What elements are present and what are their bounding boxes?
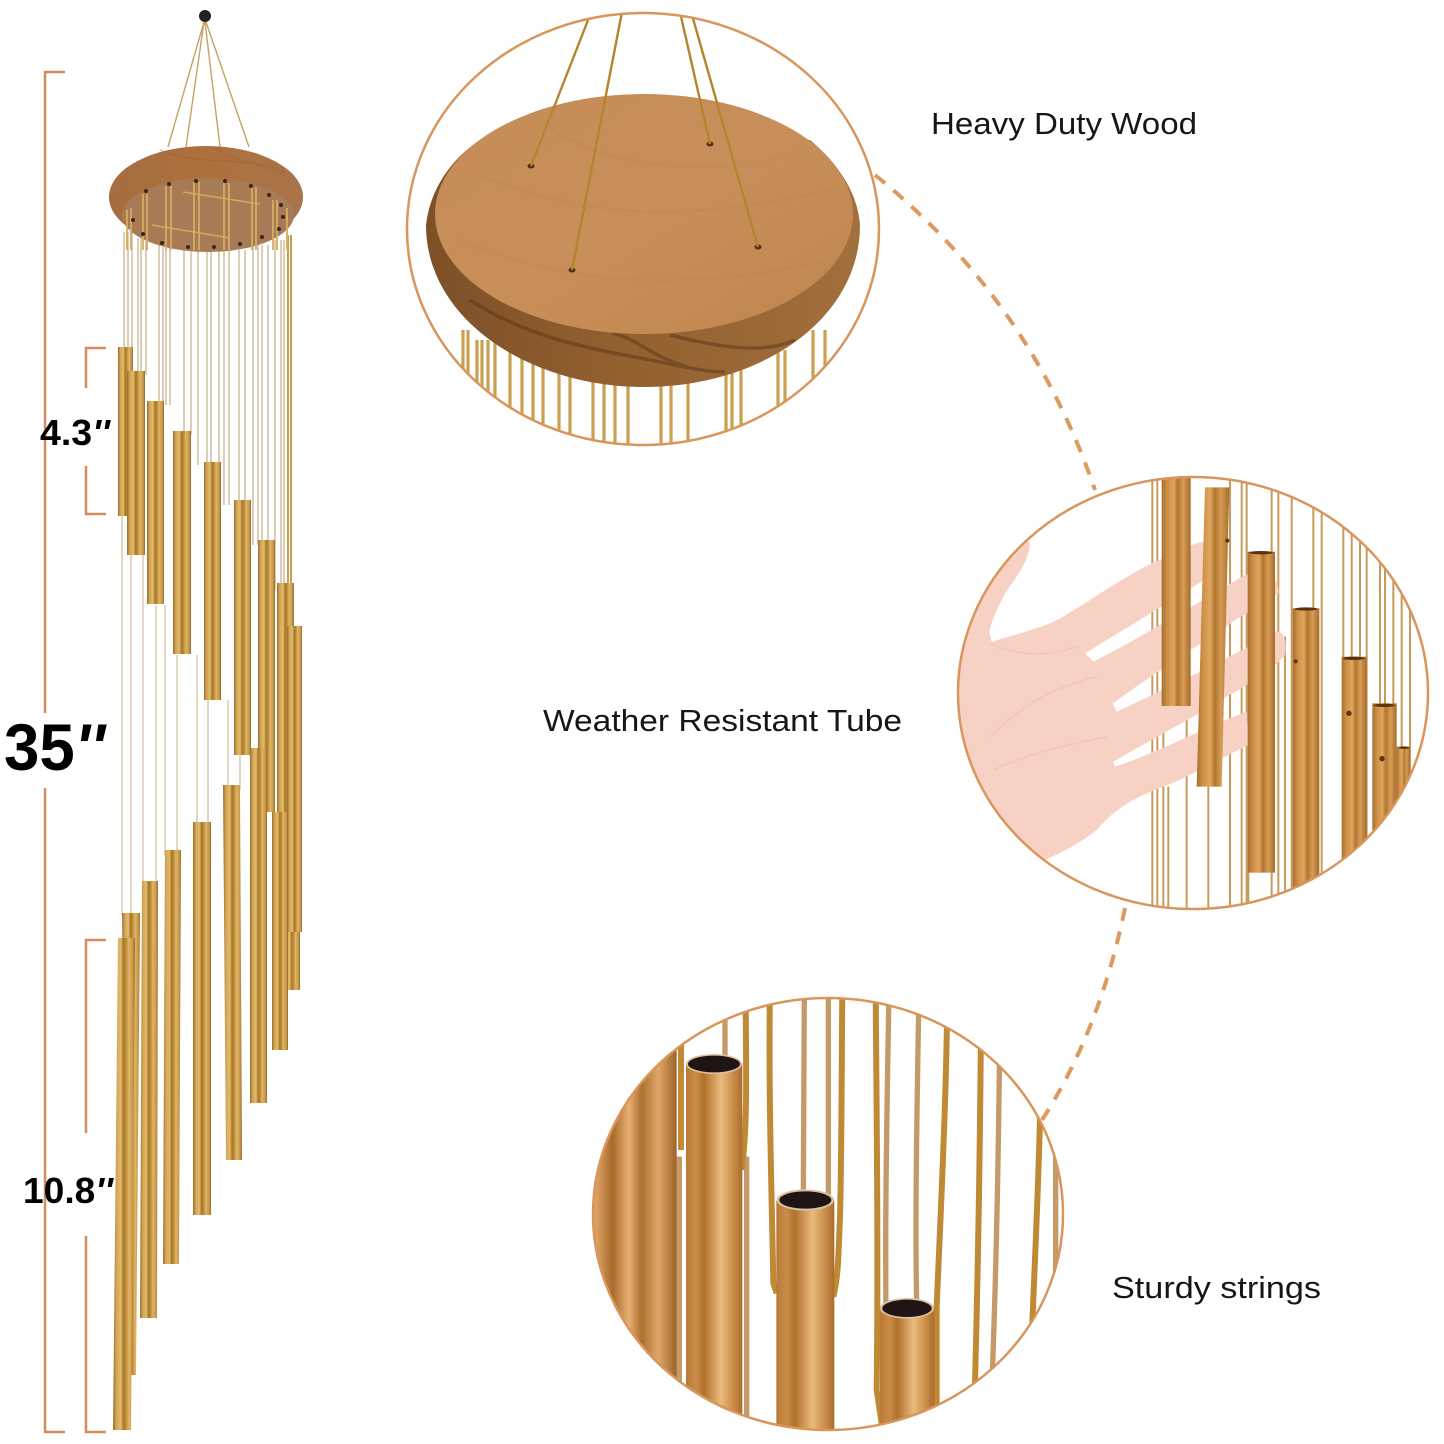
plain strings xyxy=(679,990,1056,1423)
wood disc side xyxy=(426,140,860,387)
tube strings xyxy=(122,232,291,915)
circle outline xyxy=(593,998,1063,1430)
label: 10.8 inch longest tube: 10.8'' xyxy=(23,1170,114,1211)
disc holes xyxy=(528,142,762,272)
connector: tube to strings xyxy=(1042,908,1125,1120)
full wind chime product xyxy=(109,10,303,1430)
strings under disc xyxy=(463,330,825,446)
tube three xyxy=(880,1308,934,1424)
label: 35 inch overall height: 35'' xyxy=(4,710,107,784)
panel: weather resistant tube close-up xyxy=(950,470,1428,920)
circle outline xyxy=(407,13,879,445)
heading: weather resistant tube: Weather Resistant Tube xyxy=(543,703,902,738)
big background tube xyxy=(594,1050,677,1378)
braided strings xyxy=(681,990,1040,1423)
tubes xyxy=(113,347,302,1430)
wooden disc xyxy=(109,146,303,252)
panel: sturdy strings close-up xyxy=(585,990,1063,1442)
hanging cords xyxy=(531,12,758,270)
connector: wood to tube xyxy=(875,175,1095,490)
hanging bead xyxy=(199,10,211,22)
dimension brackets xyxy=(45,72,106,1432)
heading: sturdy strings: Sturdy strings xyxy=(1112,1270,1321,1305)
heading: heavy duty wood: Heavy Duty Wood xyxy=(931,106,1197,141)
circle outline xyxy=(958,477,1428,909)
panel: heavy duty wood close-up xyxy=(407,12,879,446)
hand xyxy=(950,542,1286,860)
label: 4.3 inch shortest tube: 4.3'' xyxy=(40,412,111,453)
tube two xyxy=(776,1201,834,1441)
strings xyxy=(1152,470,1410,920)
hanging cords xyxy=(168,22,249,147)
wood disc top face xyxy=(435,94,853,334)
tubes xyxy=(1162,470,1410,908)
tube one xyxy=(686,1063,742,1440)
